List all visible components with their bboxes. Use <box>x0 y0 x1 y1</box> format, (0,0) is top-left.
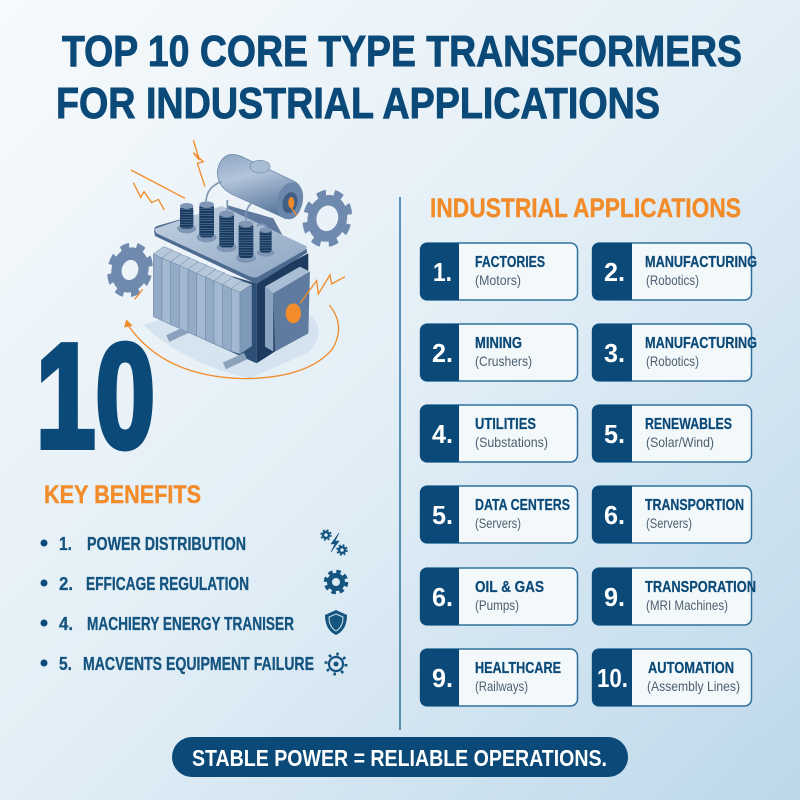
card: renewables: RENEWABLES <box>645 416 732 433</box>
benefit 3: MACHIERY ENERGY TRANISER <box>87 614 294 634</box>
benefit 4: 5. <box>59 654 72 674</box>
card: utilities <box>420 405 578 462</box>
card: automation: AUTOMATION <box>648 660 734 677</box>
card: renewables: 5. <box>604 419 625 449</box>
card: renewables: (Solar/Wind) <box>646 434 714 450</box>
card: transporation: 9. <box>604 582 625 612</box>
benefit 3 <box>40 614 294 634</box>
card: manufacturing 2 <box>592 324 757 381</box>
bushings <box>177 201 274 263</box>
card: oil and gas: OIL & GAS <box>475 579 544 596</box>
card: utilities: 4. <box>432 419 453 449</box>
icon: left gear <box>104 241 156 299</box>
transformer body <box>153 253 308 369</box>
footer banner: STABLE POWER = RELIABLE OPERATIONS. <box>192 745 607 771</box>
icon: right gear <box>299 187 355 249</box>
cooling fins <box>153 247 252 354</box>
card: manufacturing 2: MANUFACTURING <box>645 335 757 352</box>
panel: application cards <box>420 243 757 706</box>
card: healthcare <box>420 649 578 706</box>
card: utilities: UTILITIES <box>475 416 536 433</box>
card: transporation <box>592 568 756 625</box>
card: oil and gas: 6. <box>432 582 453 612</box>
conservator tank <box>217 155 307 243</box>
benefit 4: MACVENTS EQUIPMENT FAILURE <box>83 654 314 674</box>
benefit 1 <box>40 534 246 554</box>
card: manufacturing: (Robotics) <box>646 272 699 288</box>
bushing wires <box>206 182 268 229</box>
top lid <box>154 206 307 284</box>
footer banner <box>172 737 628 777</box>
card: factories: FACTORIES <box>475 254 545 271</box>
benefit 2: EFFICAGE REGULATION <box>86 574 249 594</box>
card: healthcare: HEALTHCARE <box>475 660 561 677</box>
card: transporation: (MRI Machines) <box>646 597 728 613</box>
sparks and rotation arrow <box>125 140 345 379</box>
benefit 1: 1. <box>59 534 72 554</box>
heading: key benefits: KEY BENEFITS <box>44 481 201 509</box>
heading: industrial applications: INDUSTRIAL APPLICATIONS <box>430 193 741 223</box>
card: mining: 2. <box>432 338 453 368</box>
card: transportion: (Servers) <box>646 515 692 531</box>
card: transportion <box>592 486 752 543</box>
card: data centers <box>420 486 578 543</box>
card: factories: (Motors) <box>475 272 521 288</box>
terminal box with orange dot <box>265 267 310 352</box>
benefit 2: 2. <box>59 574 73 594</box>
card: oil and gas: (Pumps) <box>475 597 519 613</box>
card: transportion: TRANSPORTION <box>645 497 744 514</box>
icon: gear <box>326 572 346 592</box>
benefit 4 <box>40 654 314 674</box>
card: automation: 10. <box>597 663 628 693</box>
benefit 3: 4. <box>59 614 73 634</box>
card: data centers: (Servers) <box>475 515 521 531</box>
benefit 1: POWER DISTRIBUTION <box>87 534 246 554</box>
card: healthcare: (Railways) <box>475 678 528 694</box>
card: oil and gas <box>420 568 578 625</box>
card: mining <box>420 324 578 381</box>
card: manufacturing <box>592 243 757 300</box>
card: factories <box>420 243 578 300</box>
benefits list <box>40 530 347 674</box>
icon: outline gear <box>326 654 346 674</box>
card: manufacturing 2: (Robotics) <box>646 353 699 369</box>
icon: shield <box>325 610 347 635</box>
card: transporation: TRANSPORATION <box>645 579 756 596</box>
card: transportion: 6. <box>604 500 625 530</box>
icon: gears and bolt <box>321 530 347 555</box>
card: mining: MINING <box>475 335 522 352</box>
illustration: transformer with gears and sparks <box>104 140 355 379</box>
card: manufacturing: 2. <box>604 257 625 287</box>
card: data centers: 5. <box>432 500 453 530</box>
card: mining: (Crushers) <box>475 353 532 369</box>
card: automation: (Assembly Lines) <box>647 678 740 694</box>
card: factories: 1. <box>433 257 452 287</box>
card: healthcare: 9. <box>432 663 453 693</box>
card: manufacturing 2: 3. <box>604 338 625 368</box>
title: FOR INDUSTRIAL APPLICATIONS <box>56 79 660 128</box>
card: data centers: DATA CENTERS <box>475 497 570 514</box>
card: automation <box>592 649 752 706</box>
benefit 2 <box>40 574 249 594</box>
card: manufacturing: MANUFACTURING <box>645 254 757 271</box>
title <box>56 27 742 128</box>
card: utilities: (Substations) <box>475 434 548 450</box>
card: renewables <box>592 405 752 462</box>
big number 10: 10 <box>36 314 155 479</box>
floor shadow <box>143 307 319 378</box>
